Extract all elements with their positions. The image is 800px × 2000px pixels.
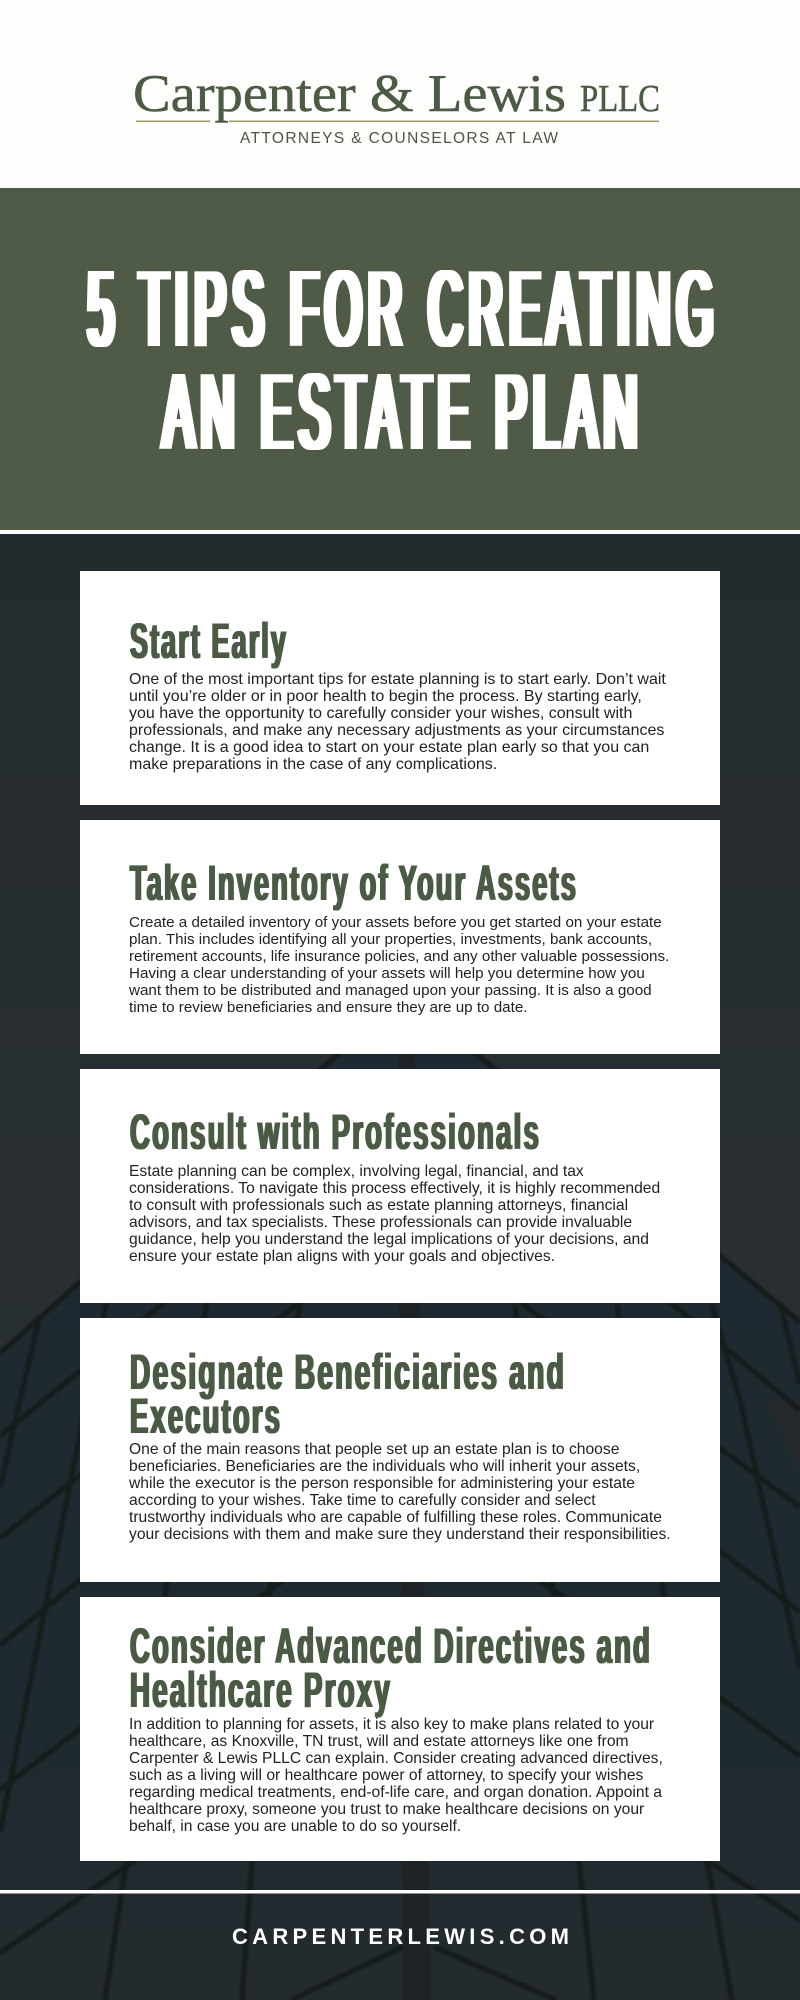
body text: change. It is a good idea to start on your estate plan early so that you can <box>129 739 649 756</box>
dark architectural background <box>0 534 800 2000</box>
heading: Consider Advanced Directives and Healthcare Proxy: Healthcare Proxy <box>130 1662 392 1718</box>
body text: Create a detailed inventory of your assets before you get started on your estate <box>129 914 662 931</box>
body text: until you’re older or in poor health to begin the process. By starting early, <box>129 688 642 705</box>
body text: beneficiaries. Beneficiaries are the individuals who will inherit your assets, <box>129 1458 640 1475</box>
body text: One of the most important tips for estate planning is to start early. Don’t wait <box>129 671 666 688</box>
heading: Start Early: Start Early <box>130 613 288 669</box>
white divider above footer <box>0 1890 800 1894</box>
body text: Carpenter & Lewis PLLC can explain. Consider creating advanced directives, <box>129 1750 663 1767</box>
panel: Take Inventory of Your Assets <box>80 820 720 1054</box>
logo: Carpenter & Lewis PLLC: PLLC <box>580 78 660 120</box>
body text: healthcare, as Knoxville, TN trust, will and estate attorneys like one from <box>129 1733 629 1750</box>
body text: guidance, help you understand the legal implications of your decisions, and <box>129 1231 649 1248</box>
body text: while the executor is the person responsible for administering your estate <box>128 1475 635 1492</box>
body text: time to review beneficiaries and ensure they are up to date. <box>129 999 527 1016</box>
white divider under banner <box>0 530 800 534</box>
body text <box>128 914 669 1016</box>
logo: Carpenter & Lewis PLLC: Carpenter & Lewis <box>133 65 566 123</box>
heading: Designate Beneficiaries and Executors <box>130 1344 566 1444</box>
body text: you have the opportunity to carefully consider your wishes, consult with <box>129 705 632 722</box>
logo: Carpenter & Lewis PLLC: ATTORNEYS & COUNSELORS AT LAW <box>240 130 558 147</box>
body text: want them to be distributed and managed upon your passing. It is also a good <box>128 982 652 999</box>
logo: Carpenter & Lewis PLLC <box>133 65 660 147</box>
body text: such as a living will or healthcare power of attorney, to specify your wishes <box>129 1767 644 1784</box>
body text: behalf, in case you are unable to do so yourself. <box>129 1818 461 1835</box>
title text <box>88 248 720 473</box>
panel: Consult with Professionals <box>80 1069 720 1303</box>
panel: Consider Advanced Directives and Healthcare Proxy <box>80 1597 720 1861</box>
body text <box>128 1441 671 1543</box>
heading: Designate Beneficiaries and Executors: Executors <box>130 1388 282 1444</box>
body text: Estate planning can be complex, involving legal, financial, and tax <box>129 1163 584 1180</box>
body text: One of the main reasons that people set up an estate plan is to choose <box>129 1441 619 1458</box>
body text: Having a clear understanding of your assets will help you determine how you <box>129 965 645 982</box>
body text: professionals, and make any necessary adjustments as your circumstances <box>129 722 664 739</box>
body text: your decisions with them and make sure they understand their responsibilities. <box>129 1526 671 1543</box>
body text: make preparations in the case of any complications. <box>129 756 497 773</box>
body text: retirement accounts, life insurance policies, and any other valuable possessions. <box>129 948 669 965</box>
body text <box>129 1716 663 1835</box>
panel: Designate Beneficiaries and Executors <box>80 1318 720 1582</box>
footer website: CARPENTERLEWIS.COM <box>232 1924 569 1949</box>
body text <box>129 671 666 773</box>
panel: Start Early <box>80 571 720 805</box>
body text: according to your wishes. Take time to carefully consider and select <box>129 1492 596 1509</box>
body text <box>129 1163 660 1265</box>
body text: healthcare proxy, someone you trust to make healthcare decisions on your <box>129 1801 644 1818</box>
body text: In addition to planning for assets, it is also key to make plans related to your <box>129 1716 654 1733</box>
body text: regarding medical treatments, end-of-life care, and organ donation. Appoint a <box>129 1784 662 1801</box>
logo band background <box>0 0 800 188</box>
body text: to consult with professionals such as estate planning attorneys, financial <box>129 1197 628 1214</box>
title banner <box>0 188 800 530</box>
body text: plan. This includes identifying all your properties, investments, bank accounts, <box>129 931 652 948</box>
body text: ensure your estate plan aligns with your goals and objectives. <box>129 1248 555 1265</box>
body text: considerations. To navigate this process effectively, it is highly recommended <box>129 1180 660 1197</box>
body text: advisors, and tax specialists. These professionals can provide invaluable <box>129 1214 632 1231</box>
heading: Consider Advanced Directives and Healthcare Proxy <box>130 1618 652 1718</box>
body text: trustworthy individuals who are capable of fulfilling these roles. Communicate <box>129 1509 662 1526</box>
